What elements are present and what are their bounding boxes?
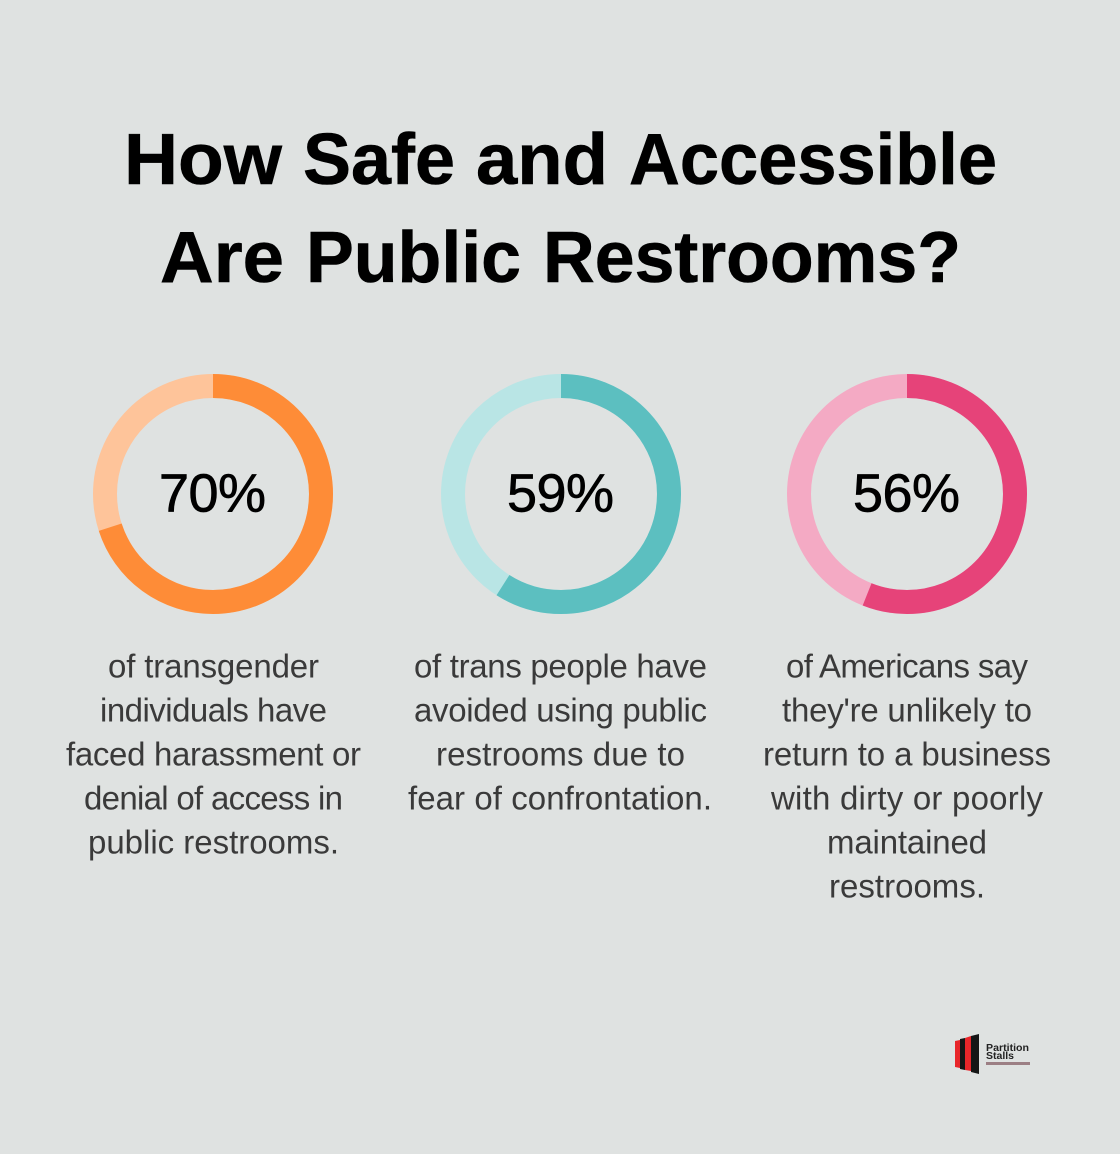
icon: partition bars: [955, 1034, 979, 1074]
description: transgender harassment: denial of access in: [84, 780, 343, 816]
title: Safe: [303, 120, 455, 200]
logo text: Partition: [986, 1043, 1029, 1054]
panel: 59% statistic: [408, 386, 712, 816]
title: Restrooms?: [543, 218, 961, 298]
logo: Partition Stalls: [955, 1034, 1030, 1074]
panel: 56% statistic: [763, 386, 1051, 904]
description: dirty restrooms: [763, 648, 1051, 904]
description: transgender harassment: public restrooms.: [88, 824, 339, 860]
title: Accessible: [629, 120, 997, 200]
description: dirty restrooms: with dirty or poorly: [770, 780, 1044, 816]
title: and: [476, 120, 608, 200]
description: transgender harassment: [66, 648, 361, 860]
description: avoided restrooms: restrooms due to: [436, 736, 685, 772]
description: dirty restrooms: of Americans say: [786, 648, 1028, 684]
donut chart: 70%: [105, 386, 321, 602]
logo text: [986, 1043, 1030, 1065]
title: Are: [160, 218, 284, 298]
value: 59%: 59%: [507, 464, 614, 524]
description: transgender harassment: individuals have: [100, 692, 327, 728]
description: transgender harassment: faced harassment or: [66, 736, 361, 772]
title: [124, 120, 997, 298]
description: avoided restrooms: of trans people have: [414, 648, 707, 684]
logo text: Stalls: [986, 1051, 1014, 1062]
donut chart: 56%: [799, 386, 1015, 602]
description: dirty restrooms: they're unlikely to: [782, 692, 1032, 728]
value: 56%: 56%: [853, 464, 960, 524]
description: dirty restrooms: return to a business: [763, 736, 1051, 772]
donut chart: 59%: [453, 386, 669, 602]
panel: 70% statistic: [66, 386, 361, 860]
description: transgender harassment: of transgender: [108, 648, 319, 684]
value: 70%: 70%: [159, 464, 266, 524]
title: How: [124, 120, 283, 200]
description: avoided restrooms: fear of confrontation.: [408, 780, 712, 816]
description: dirty restrooms: restrooms.: [829, 868, 985, 904]
description: dirty restrooms: maintained: [827, 824, 987, 860]
description: avoided restrooms: avoided using public: [414, 692, 707, 728]
title: Public: [306, 218, 521, 298]
description: avoided restrooms: [408, 648, 712, 816]
